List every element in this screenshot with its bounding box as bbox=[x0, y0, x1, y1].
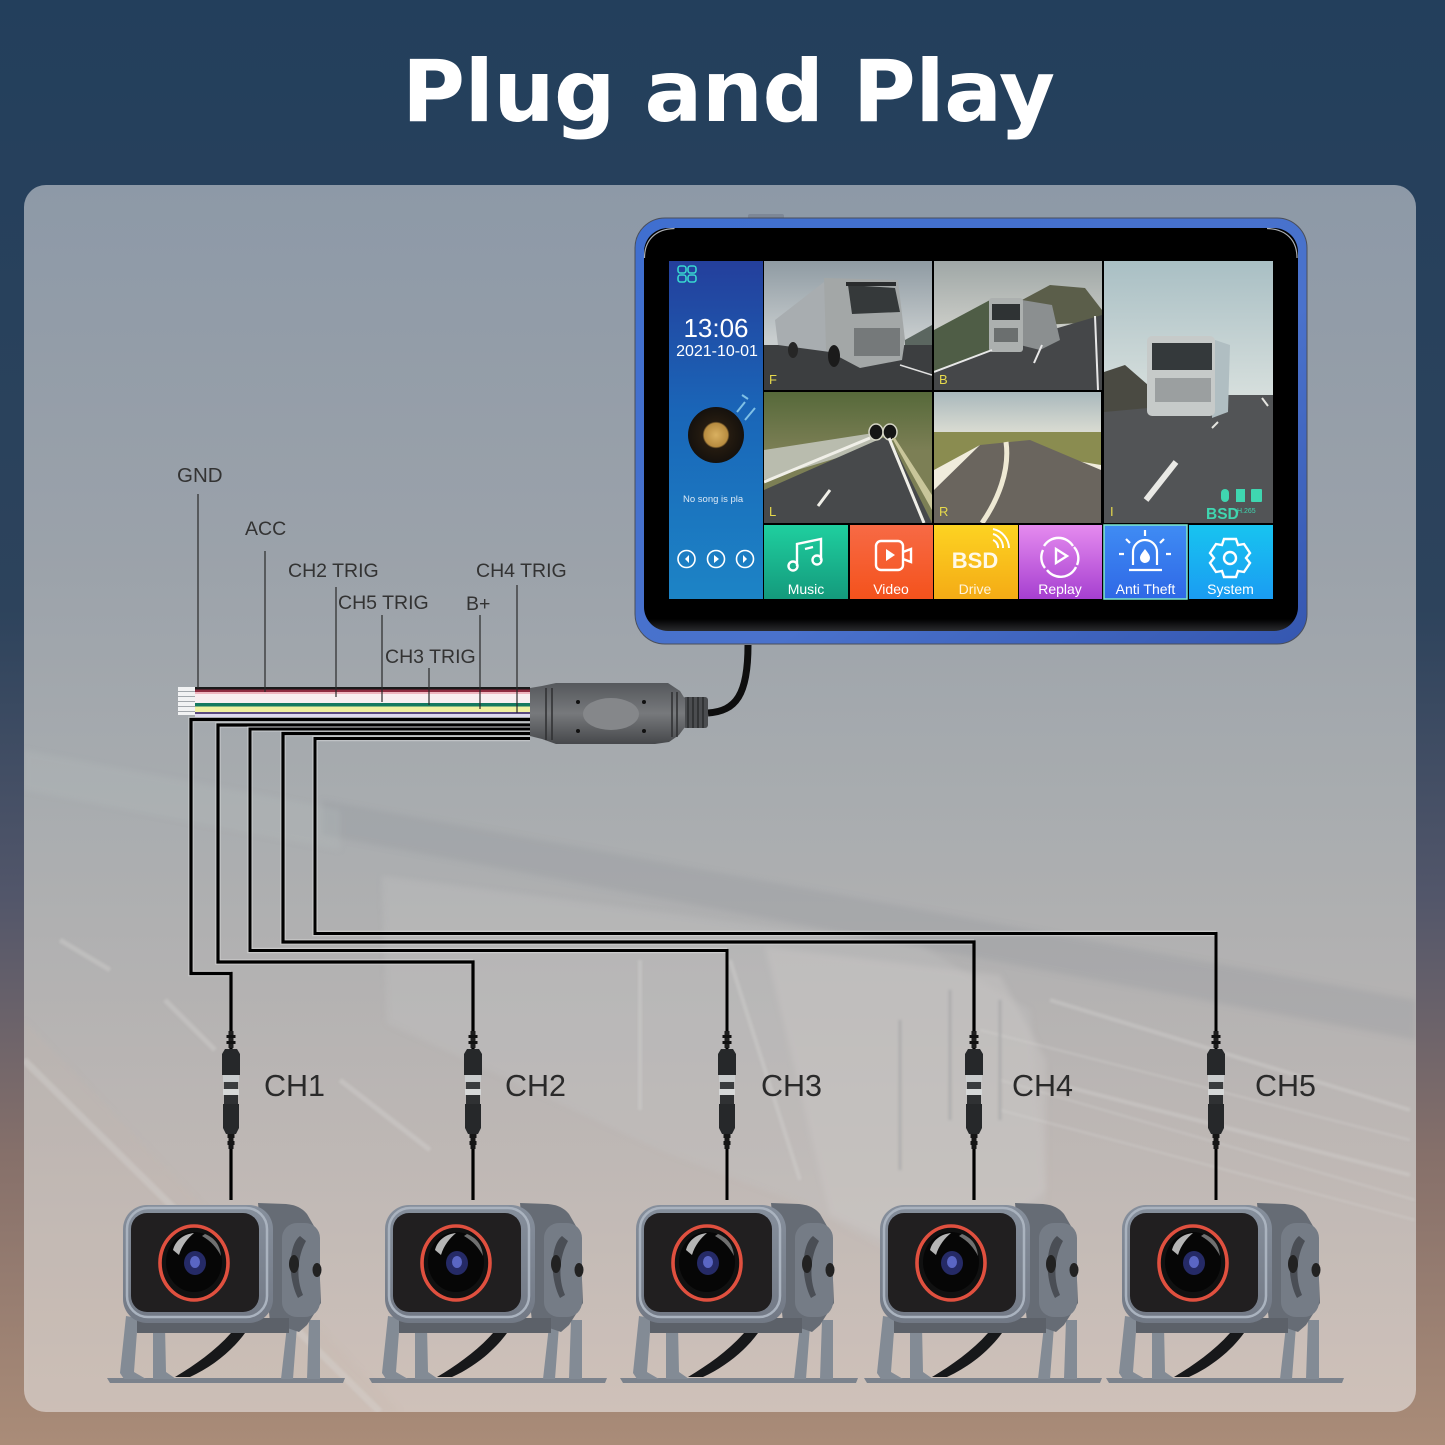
icon: status indicators bbox=[1221, 489, 1262, 502]
menu tile: Video: Video bbox=[873, 581, 909, 597]
label: GND: GND bbox=[177, 464, 223, 487]
camera view: rear (R) bbox=[934, 392, 1101, 523]
monitor: black glass bbox=[644, 228, 1298, 631]
date: 2021-10-01 bbox=[676, 343, 758, 360]
icon: vinyl record bbox=[688, 395, 755, 463]
camera CH5 bbox=[1106, 1203, 1344, 1383]
icon: app grid bbox=[678, 266, 696, 282]
channel label CH3: CH3 bbox=[761, 1069, 822, 1103]
monitor: blue bezel bbox=[635, 218, 1307, 644]
camera view: interior (I) bbox=[1104, 261, 1273, 523]
channel CH5 bbox=[1106, 1031, 1344, 1383]
song status: No song is pla bbox=[683, 494, 744, 505]
menu tile: Music: Music bbox=[788, 581, 824, 597]
menu tile: Replay: Replay bbox=[1038, 581, 1082, 597]
wire ribbon bbox=[178, 687, 530, 717]
camera label I: I bbox=[1110, 504, 1114, 519]
camera label R: R bbox=[939, 504, 948, 519]
channel label CH1: CH1 bbox=[264, 1069, 325, 1103]
label: CH5 TRIG: CH5 TRIG bbox=[338, 592, 429, 614]
camera CH1 bbox=[107, 1203, 345, 1383]
H.265 badge: H.265 bbox=[1237, 508, 1256, 515]
playback controls bbox=[678, 550, 754, 568]
connector bbox=[530, 683, 708, 744]
title: Plug and Play bbox=[402, 42, 1055, 142]
menu tile: System bbox=[1189, 525, 1273, 599]
menu tile: Anti Theft bbox=[1104, 525, 1187, 599]
plug: CH4 bbox=[965, 1031, 983, 1149]
menu tile: Video bbox=[850, 525, 933, 599]
cable: CH1 bbox=[191, 720, 530, 1200]
camera view: back (B) bbox=[934, 261, 1102, 390]
channel label CH4: CH4 bbox=[1012, 1069, 1073, 1103]
cable: CH5 bbox=[315, 738, 1216, 1200]
channel label CH2: CH2 bbox=[505, 1069, 566, 1103]
label: ACC: ACC bbox=[245, 518, 286, 540]
label: CH2 TRIG bbox=[288, 560, 379, 697]
label: CH3 TRIG: CH3 TRIG bbox=[385, 646, 476, 668]
label: B+ bbox=[466, 593, 490, 709]
channel label CH5: CH5 bbox=[1255, 1069, 1316, 1103]
menu tile: Music bbox=[764, 525, 848, 599]
label: CH2 TRIG: CH2 TRIG bbox=[288, 560, 379, 582]
cable: CH3 bbox=[250, 729, 727, 1200]
plug: CH1 bbox=[222, 1031, 240, 1149]
monitor bbox=[635, 214, 1307, 644]
cable: CH2 bbox=[218, 725, 530, 1200]
menu tile: Replay bbox=[1019, 525, 1102, 599]
camera view: front (F) bbox=[764, 261, 932, 390]
camera label L: L bbox=[769, 504, 776, 519]
camera CH4 bbox=[864, 1203, 1102, 1383]
monitor: top button bbox=[748, 214, 784, 219]
camera label B: B bbox=[939, 372, 948, 387]
menu tile: Drive bbox=[934, 525, 1018, 599]
wire ends bbox=[178, 687, 195, 715]
channel CH3 bbox=[620, 1031, 858, 1383]
channel CH2 bbox=[369, 1031, 607, 1383]
menu tile: Drive: Drive bbox=[959, 581, 992, 597]
label: CH4 TRIG: CH4 TRIG bbox=[476, 560, 567, 582]
camera label F: F bbox=[769, 372, 777, 387]
camera CH2 bbox=[369, 1203, 607, 1383]
wire labels bbox=[177, 464, 567, 713]
channel CH4 bbox=[864, 1031, 1102, 1383]
plug: CH2 bbox=[464, 1031, 482, 1149]
clock: 13:06 bbox=[683, 313, 749, 343]
camera cables bbox=[191, 720, 1216, 1200]
label: CH5 TRIG bbox=[338, 592, 429, 702]
menu tile: Drive: BSD bbox=[952, 548, 998, 573]
label: CH3 TRIG bbox=[385, 646, 476, 705]
screen: sidebar bbox=[669, 261, 763, 599]
camera view: left (L) bbox=[764, 392, 932, 523]
BSD badge: BSD bbox=[1206, 506, 1239, 523]
label: B+: B+ bbox=[466, 593, 490, 615]
plug: CH5 bbox=[1207, 1031, 1225, 1149]
menu tile: System: System bbox=[1207, 581, 1254, 597]
menu tile: Anti Theft: Anti Theft bbox=[1116, 581, 1175, 597]
plug: CH3 bbox=[718, 1031, 736, 1149]
camera CH3 bbox=[620, 1203, 858, 1383]
monitor cable bbox=[708, 645, 748, 713]
channel CH1 bbox=[107, 1031, 345, 1383]
cable: CH4 bbox=[283, 734, 974, 1200]
